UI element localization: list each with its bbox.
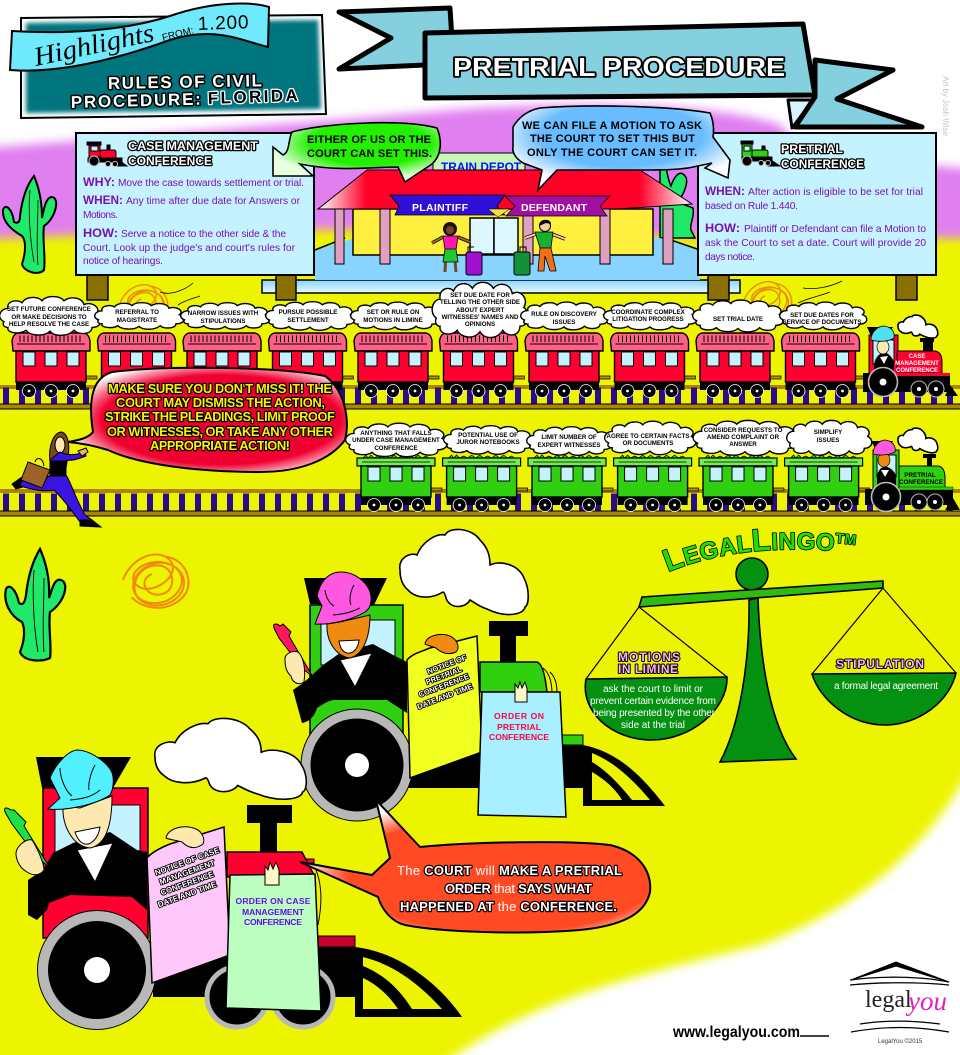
boiler: [227, 852, 321, 925]
title ribbon: highlights: [10, 4, 326, 118]
speech bubble: file a motion: ONLY THE COURT CAN SET IT.: [527, 147, 697, 159]
callout: court will make a pretrial order: The COURT will MAKE A PRETRIAL: [397, 863, 622, 878]
person: defendant with suitcase: [514, 220, 565, 275]
station building: [353, 209, 653, 255]
label cloud: expert witnesses: EXPERT WITNESSES: [538, 442, 600, 449]
speech bubble: either of us: COURT CAN SET THIS.: [307, 148, 432, 160]
label cloud: set future conference: [0, 297, 101, 335]
label cloud: amend: AMEND COMPLAINT OR: [707, 434, 780, 441]
notice paper: CONFERENCE: [159, 869, 216, 897]
order paper: MANAGEMENT: [242, 907, 305, 917]
label cloud: juror notebooks: [444, 426, 533, 454]
how: [705, 221, 926, 263]
green locomotive: PRETRIAL: [904, 472, 936, 479]
when: WHEN:: [83, 193, 123, 207]
driver: [28, 750, 147, 920]
cactus: behind station: [660, 163, 695, 238]
speech bubble: either of us: EITHER OF US OR THE: [307, 134, 431, 146]
teal panel: [21, 15, 326, 118]
rules heading: FLORIDA: [207, 86, 298, 108]
how: HOW:: [83, 226, 118, 240]
railroad track: pretrial: [0, 491, 960, 516]
label cloud: motions in limine: [351, 302, 440, 330]
person: plaintiff with suitcase: [432, 222, 482, 275]
label cloud: expert witnesses: TELLING THE OTHER SIDE: [440, 299, 520, 306]
when: based on Rule 1.440.: [705, 201, 798, 212]
how: Court. Look up the judge's and court's rules for: [83, 243, 296, 254]
callout: court will make a pretrial order: ORDER that SAYS WHAT: [445, 881, 592, 896]
when: After action is eligible to be set for trial: [748, 187, 923, 198]
train station: [262, 153, 740, 293]
panel heading: CONFERENCE: [128, 156, 212, 168]
logo: legalyou: LegalYou ©2015: [878, 1038, 923, 1045]
icon: green locomotive: [741, 141, 780, 166]
label cloud: narrow issues: STIPULATIONS: [201, 318, 245, 325]
callout: court will make a pretrial order: [300, 800, 650, 932]
red locomotive: [863, 315, 958, 397]
label cloud: discovery issues: RULE ON DISCOVERY: [531, 311, 598, 318]
speech bubble: either of us: [273, 123, 440, 182]
scribble: lower left: [123, 554, 188, 608]
label cloud: discovery issues: [521, 302, 608, 330]
label cloud: juror notebooks: JUROR NOTEBOOKS: [456, 439, 520, 446]
depot sign: [433, 153, 525, 178]
panel heading: [781, 144, 864, 171]
railroad track: case management: [0, 387, 960, 409]
when: Motions.: [83, 210, 118, 221]
callout: make sure you don't miss it: [68, 368, 347, 472]
speech bubble: file a motion: WE CAN FILE A MOTION TO ASK: [522, 120, 702, 132]
green locomotive: [865, 428, 960, 512]
depot sign: TRAIN DEPOT: [441, 160, 522, 174]
label cloud: pursue settlement: [266, 302, 355, 330]
label cloud: amend: ANSWER: [729, 441, 757, 448]
order paper: [226, 862, 321, 1011]
label cloud: simplify: ISSUES: [817, 437, 839, 444]
label cloud: amend: CONSIDER REQUESTS TO: [704, 427, 782, 434]
chimney: [489, 621, 528, 662]
right pan: a formal legal agreement: [834, 681, 938, 692]
right pan: [812, 588, 956, 725]
red locomotive: CASE: [909, 354, 925, 360]
rules heading: RULES OF CIVIL: [108, 71, 262, 93]
notice paper: PRETRIAL: [424, 664, 463, 687]
title text: PRETRIAL PROCEDURE: [453, 52, 785, 82]
big green locomotive: [274, 572, 665, 821]
callout: make sure you don't miss it: COURT MAY DISMISS THE ACTION,: [116, 395, 325, 410]
order paper: PRETRIAL: [497, 722, 541, 732]
website url: www.legalyou.com: [672, 1024, 800, 1041]
label cloud: amend: [693, 420, 797, 456]
cowcatcher: [583, 745, 665, 806]
left pan: IN LIMINE: [618, 662, 678, 676]
label cloud: referral: MAGISTRATE: [117, 317, 157, 324]
cyan ribbon: [10, 4, 269, 71]
left pan: [585, 607, 727, 740]
how: notice of hearings.: [83, 256, 163, 267]
panel: case management conference: [76, 133, 314, 275]
panel heading: PRETRIAL: [781, 144, 843, 156]
pen and hand: [274, 624, 313, 684]
label cloud: pursue settlement: PURSUE POSSIBLE: [279, 309, 337, 316]
left pan: being presented by the other: [593, 708, 716, 719]
label cloud: set future conference: HELP RESOLVE THE CASE: [9, 321, 89, 328]
when: WHEN:: [705, 184, 745, 198]
label cloud: service of documents: [780, 302, 867, 330]
label cloud: anything: ANYTHING THAT FALLS: [360, 430, 432, 437]
notice paper: NOTICE OF CASE: [154, 845, 221, 877]
callout: make sure you don't miss it: OR WITNESSES, OR TAKE ANY OTHER: [107, 424, 334, 439]
label cloud: simplify: [787, 420, 872, 456]
plaintiff sign: PLAINTIFF: [412, 202, 469, 214]
cowcatcher: [355, 947, 462, 1017]
notice paper: CONFERENCE: [417, 672, 470, 699]
chassis: [153, 936, 355, 997]
label cloud: anything: [346, 423, 447, 457]
art credit: Art by Josh Wise: [941, 76, 950, 137]
station columns: [335, 209, 673, 264]
label cloud: motions in limine: SET OR RULE ON: [367, 309, 420, 316]
label cloud: trial date: SET TRIAL DATE: [713, 316, 763, 323]
panel heading: [128, 141, 258, 168]
label cloud: expert witnesses: [527, 427, 612, 455]
panel heading: CASE MANAGEMENT: [128, 141, 258, 153]
cab: [304, 578, 403, 755]
green train carriages: [357, 455, 870, 512]
label cloud: facts or documents: [605, 421, 696, 455]
logo: legalyou: legal: [865, 987, 912, 1013]
notice paper: [147, 827, 230, 983]
green locomotive: CONFERENCE: [899, 479, 943, 486]
legal lingo heading: LEGALLINGO: [662, 528, 834, 572]
when: [83, 193, 301, 221]
why: Move the case towards settlement or trial.: [118, 178, 304, 189]
callout: make sure you don't miss it: MAKE SURE YOU DON'T MISS IT! THE: [108, 381, 332, 396]
order paper: CONFERENCE: [489, 732, 549, 742]
label cloud: coordinate: LITIGATION PROGRESS: [612, 316, 684, 323]
speech bubble: file a motion: THE COURT TO SET THIS BUT: [530, 133, 695, 145]
label cloud: expert witnesses: [432, 282, 528, 338]
legal lingo heading: [662, 528, 857, 572]
label cloud: expert witnesses: WITNESSES' NAMES AND: [442, 314, 519, 321]
red locomotive: MANAGEMENT: [895, 361, 939, 367]
how: Serve a notice to the other side & the: [121, 229, 286, 240]
big red locomotive: [5, 750, 462, 1030]
defendant sign: DEFENDANT: [521, 202, 588, 214]
scale: legal lingo: [584, 528, 957, 763]
title banner: pretrial procedure: [339, 8, 922, 128]
defendant sign: [505, 196, 610, 216]
driver: [293, 572, 407, 723]
label cloud: simplify: SIMPLIFY: [814, 429, 843, 436]
label cloud: coordinate: COORDINATE COMPLEX: [611, 309, 686, 316]
label cloud: expert witnesses: LIMIT NUMBER OF: [541, 434, 597, 441]
notice paper: DATE AND TIME: [157, 879, 218, 909]
callout: make sure you don't miss it: APPROPRIATE ACTION!: [150, 438, 290, 453]
station roof: [318, 170, 692, 209]
boiler: [480, 662, 557, 694]
small wheels: [207, 967, 333, 1027]
left pan: side at the trial: [621, 720, 685, 731]
when: [705, 184, 923, 212]
label cloud: service of documents: SET DUE DATES FOR: [790, 312, 854, 319]
scale beam and post: [639, 558, 883, 762]
chimney: [247, 805, 292, 852]
logo: legalyou: [850, 962, 949, 1045]
how: days notice.: [705, 252, 755, 263]
why: WHY:: [83, 175, 115, 189]
label cloud: anything: UNDER CASE MANAGEMENT: [352, 437, 440, 444]
callout: make sure you don't miss it: STRIKE THE PLEADINGS, LIMIT PROOF: [105, 409, 335, 424]
figure: running lawyer: [12, 432, 101, 527]
notice paper: MANAGEMENT: [158, 858, 216, 887]
label cloud: juror notebooks: POTENTIAL USE OF: [458, 432, 518, 439]
order paper: [478, 682, 566, 817]
why: [83, 175, 304, 189]
label cloud: set future conference: SET FUTURE CONFERENCE: [7, 306, 91, 313]
order paper: ORDER ON: [494, 711, 544, 721]
left pan: prevent certain evidence from: [590, 696, 716, 707]
label cloud: discovery issues: ISSUES: [553, 319, 575, 326]
when: Any time after due date for Answers or: [126, 196, 301, 207]
cab: [36, 757, 148, 938]
label cloud: motions in limine: MOTIONS IN LIMINE: [363, 317, 423, 324]
legal lingo heading: TM: [835, 532, 857, 546]
cactus: upper left: [3, 176, 56, 273]
big wheel: [301, 709, 413, 821]
how: ask the Court to set a date. Court will provide 20: [705, 238, 926, 249]
label cloud: expert witnesses: ABOUT EXPERT: [456, 307, 504, 314]
callout: court will make a pretrial order: HAPPENED AT the CONFERENCE.: [400, 899, 617, 914]
panel heading: CONFERENCE: [781, 159, 864, 171]
highlights script: Highlights: [30, 17, 157, 72]
how: Plaintiff or Defendant can file a Motion to: [744, 224, 926, 235]
from label: FROM:: [161, 25, 195, 44]
station doors: [470, 218, 518, 254]
label cloud: trial date: [693, 300, 784, 332]
logo: legalyou: you: [905, 986, 947, 1016]
speech bubble: file a motion: [513, 106, 730, 190]
label cloud: facts or documents: AGREE TO CERTAIN FACTS: [607, 433, 689, 440]
label cloud: facts or documents: OR DOCUMENTS: [623, 440, 673, 447]
label cloud: expert witnesses: OPINIONS: [465, 321, 495, 328]
icon: red locomotive: [87, 142, 127, 167]
scribble: upper left: [120, 283, 200, 323]
label cloud: expert witnesses: SET DUE DATE FOR: [450, 292, 510, 299]
how: HOW:: [705, 221, 740, 235]
rule number: 1.200: [197, 12, 250, 35]
label cloud: pursue settlement: SETTLEMENT: [287, 317, 329, 324]
label cloud: set future conference: OR MAKE DECISIONS TO: [11, 314, 87, 321]
how: [83, 226, 296, 267]
label cloud: referral: REFERRAL TO: [115, 309, 159, 316]
label cloud: narrow issues: NARROW ISSUES WITH: [188, 310, 259, 317]
notice paper: NOTICE OF: [426, 653, 468, 676]
red locomotive: CONFERENCE: [896, 368, 938, 374]
scribble: upper right: [744, 281, 842, 320]
chassis: [408, 735, 583, 788]
rules heading: [71, 71, 298, 112]
notice paper: [407, 634, 482, 778]
cactus: lower left: [5, 549, 65, 660]
plaintiff sign: [390, 195, 505, 215]
order paper: CONFERENCE: [244, 917, 302, 927]
big cloud: pretrial locomotive: [400, 529, 528, 615]
label cloud: coordinate: [604, 302, 697, 330]
big cloud: case management locomotive: [155, 718, 306, 799]
order paper: ORDER ON CASE: [236, 896, 311, 906]
red train carriages: [12, 333, 866, 398]
label cloud: service of documents: SERVICE OF DOCUMENTS: [783, 319, 861, 326]
label cloud: narrow issues: [181, 303, 270, 329]
label cloud: referral: [95, 303, 184, 329]
left pan: ask the court to limit or: [603, 684, 704, 695]
sign posts: [87, 275, 917, 300]
rules heading: PROCEDURE:: [71, 90, 201, 112]
label cloud: anything: CONFERENCE: [374, 445, 418, 452]
pen and hand: [5, 808, 50, 875]
left pan: MOTIONS: [618, 650, 680, 664]
panel: pretrial conference: [698, 133, 936, 275]
notice paper: DATE AND TIME: [416, 682, 474, 711]
big wheel: [38, 910, 156, 1030]
right pan: STIPULATION: [836, 657, 924, 671]
